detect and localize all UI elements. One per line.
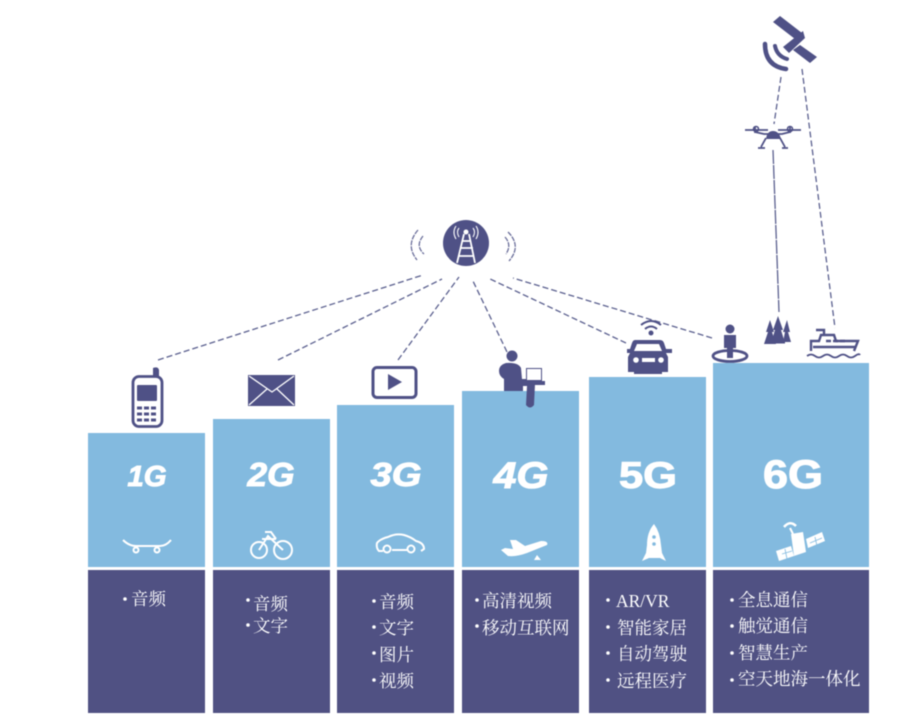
panel: 4G <box>462 391 579 567</box>
panel: 5G <box>589 377 706 567</box>
panel: 1G services: 音频 <box>131 589 166 609</box>
panel: 3G services: 图片 <box>379 645 414 665</box>
panel: 3G services: 音频 <box>379 592 414 612</box>
panel: 2G services <box>213 570 330 713</box>
icon: ship <box>807 330 860 358</box>
icon: video player <box>373 368 416 398</box>
icon: person with laptop <box>499 350 545 408</box>
icon: drone <box>745 126 801 148</box>
panel: 2G <box>213 419 330 567</box>
panel: 5G services: AR/VR <box>616 591 670 611</box>
icon: connected car <box>627 321 672 374</box>
panel: 5G services: 自动驾驶 <box>617 644 687 664</box>
panel: 4G: 4G <box>492 455 548 496</box>
panel: 2G: 2G <box>246 456 294 493</box>
panel: 6G: 6G <box>763 453 823 497</box>
icon: envelope <box>248 375 295 406</box>
panel: 2G services: 文字 <box>253 616 288 636</box>
panel: 4G services: 高清视频 <box>482 591 552 611</box>
panel: 5G services <box>589 570 706 713</box>
icon: mobile phone <box>133 367 162 426</box>
icon: skateboard <box>123 540 171 552</box>
panel: 4G services <box>462 570 579 713</box>
panel: 6G services: 全息通信 <box>738 590 808 610</box>
panel: 3G: 3G <box>370 456 422 493</box>
icon: satellite small <box>776 523 825 561</box>
connection lines from tower and satellite <box>158 69 835 360</box>
panel: 5G: 5G <box>619 455 677 496</box>
icon: rocket <box>642 524 666 561</box>
panel: 3G services <box>337 570 454 713</box>
panel: 6G <box>713 363 869 567</box>
icon: base station tower with signal arcs <box>411 220 515 266</box>
panel: 3G <box>337 405 454 567</box>
panel: 3G services: 视频 <box>379 671 414 691</box>
panel: 3G services: 文字 <box>379 618 414 638</box>
icon: bicycle <box>251 532 292 559</box>
icon: person on ring <box>713 324 747 362</box>
panel: 4G services: 移动互联网 <box>482 618 570 638</box>
panel: 1G services <box>88 570 205 713</box>
panel: 2G services: 音频 <box>253 594 288 614</box>
icon: satellite with signal waves <box>765 16 817 69</box>
panel: 6G services: 触觉通信 <box>738 616 808 636</box>
icon: car outline <box>377 534 424 552</box>
panel: 6G services: 智慧生产 <box>738 643 808 663</box>
panel: 6G services <box>713 570 869 713</box>
panel: 1G: 1G <box>128 461 166 493</box>
panel: 5G services: 智能家居 <box>617 618 687 638</box>
icon: airplane <box>501 540 547 560</box>
panel: 6G services: 空天地海一体化 <box>738 669 860 689</box>
icon: trees <box>764 316 791 344</box>
panel: 5G services: 远程医疗 <box>617 671 687 691</box>
panel: 1G <box>88 433 205 567</box>
